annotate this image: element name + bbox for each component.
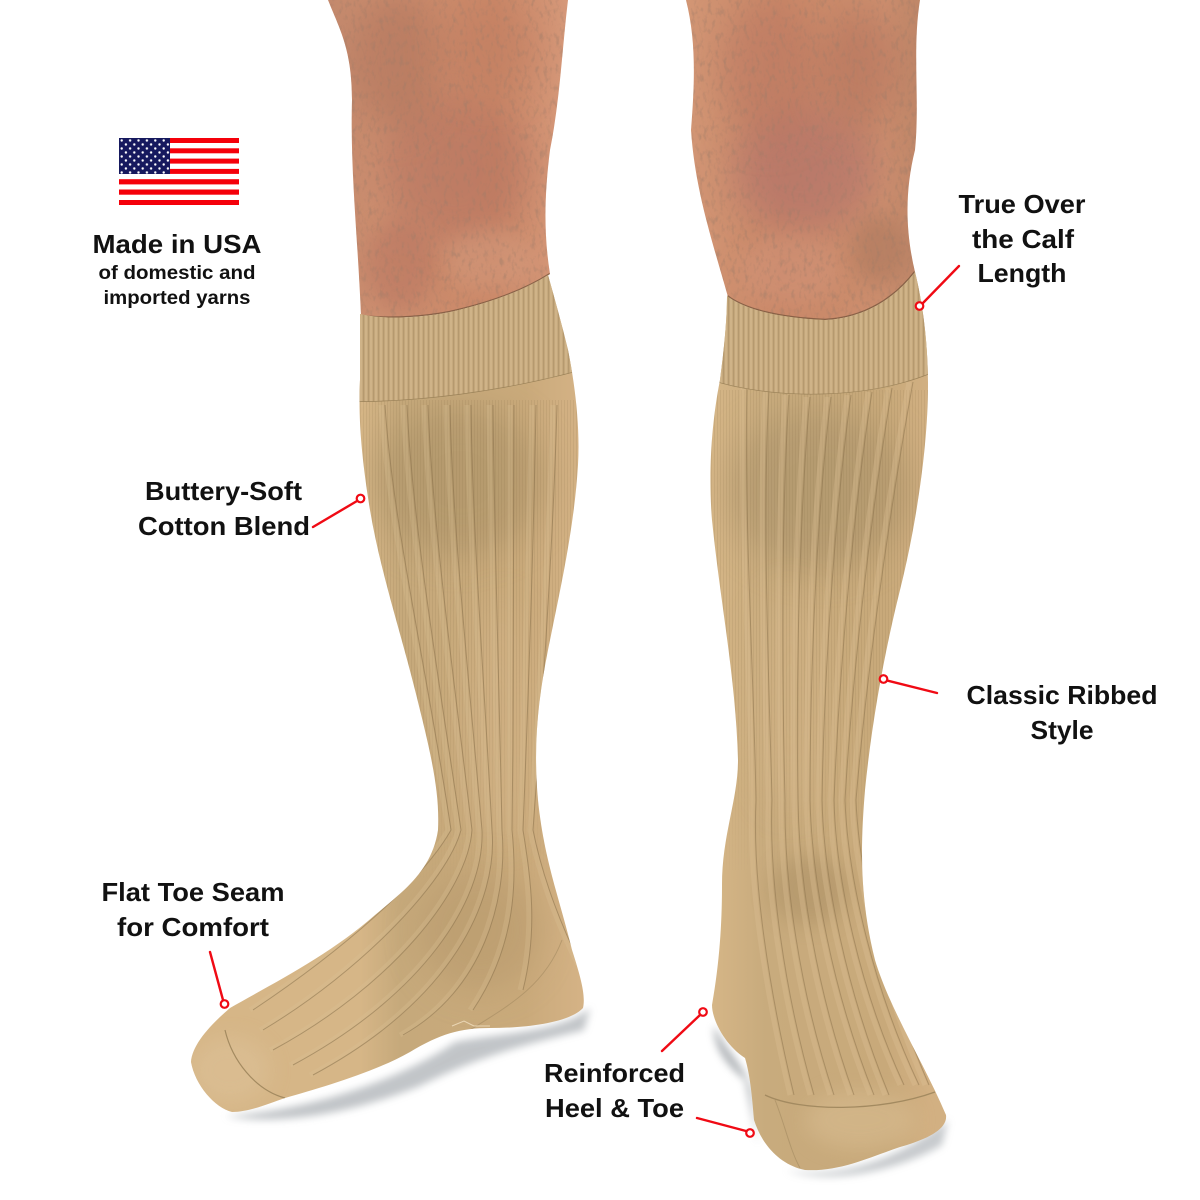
left leg skin <box>320 0 570 320</box>
callout: classic ribbed style <box>880 675 1158 745</box>
left sock <box>190 270 585 1112</box>
text block: made in USA: imported yarns <box>104 288 250 309</box>
callout: flat toe seam for comfort: for Comfort <box>117 912 269 942</box>
ribbed cuff <box>719 272 928 394</box>
callout: buttery-soft cotton blend <box>138 476 364 541</box>
toe and heel seams <box>225 1030 285 1098</box>
floor shadows beneath the feet <box>225 1008 948 1176</box>
tonal shading: upper calf and foot <box>375 405 545 555</box>
callout: buttery-soft cotton blend: Buttery-Soft <box>145 476 302 506</box>
right leg skin <box>680 0 925 325</box>
callout: flat toe seam for comfort <box>102 877 284 1008</box>
text block: made in USA: Made in USA <box>92 229 262 259</box>
callout: reinforced heel and toe: Heel & Toe <box>545 1093 684 1123</box>
icon: American flag <box>119 138 239 205</box>
callout: true over the calf length: Length <box>978 258 1066 288</box>
toe seam <box>765 1092 935 1107</box>
callout: classic ribbed style: Classic Ribbed <box>966 680 1158 710</box>
callout: reinforced heel and toe: Reinforced <box>544 1058 685 1088</box>
right sock <box>705 270 946 1170</box>
ribbed cuff <box>360 275 572 402</box>
text block: made in USA <box>92 229 262 309</box>
sock ribs <box>381 405 553 989</box>
callout: true over the calf length: True Over <box>958 189 1086 219</box>
callout: classic ribbed style: Style <box>1030 715 1094 745</box>
callout: true over the calf length: the Calf <box>972 224 1074 254</box>
tonal shading: shin and ankle <box>730 410 910 570</box>
text block: made in USA: of domestic and <box>98 263 256 284</box>
callout: flat toe seam for comfort: Flat Toe Seam <box>102 877 284 907</box>
callout: buttery-soft cotton blend: Cotton Blend <box>138 511 310 541</box>
callout: reinforced heel and toe <box>544 1008 754 1137</box>
sock ribs <box>742 382 925 1095</box>
callout: true over the calf length <box>916 189 1086 310</box>
